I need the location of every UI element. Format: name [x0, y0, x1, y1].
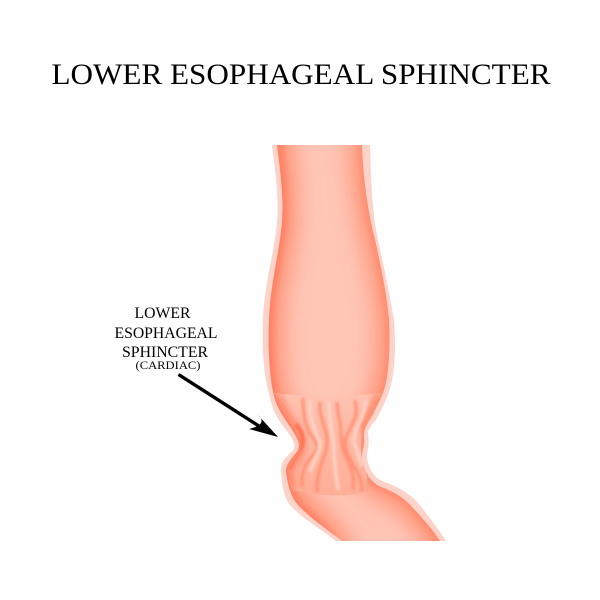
inner lumen with contour shading [268, 145, 440, 541]
outer wall [263, 145, 446, 541]
shaded left wall of folds [275, 393, 301, 490]
side label: ESOPHAGEAL [114, 325, 218, 342]
side label: (CARDIAC) [136, 358, 201, 372]
fold band base [275, 393, 381, 496]
arrow [178, 374, 278, 437]
shaded right wall of folds [362, 393, 381, 432]
illustration: esophagus with sphincter [262, 145, 446, 541]
fold highlights [310, 400, 366, 490]
side label [114, 305, 218, 372]
fold creases [302, 398, 369, 492]
title: LOWER ESOPHAGEAL SPHINCTER [52, 58, 550, 91]
dark fold at neck [289, 424, 303, 468]
sphincter folds [275, 393, 381, 496]
side label: LOWER [134, 305, 191, 322]
side label: SPHINCTER [122, 344, 209, 361]
